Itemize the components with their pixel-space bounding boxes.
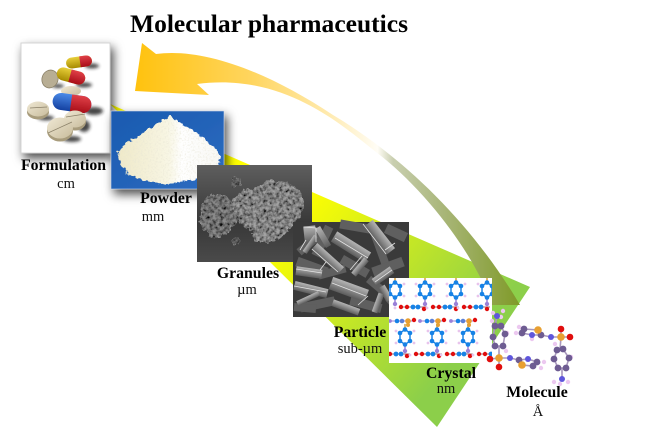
label: molecule angstrom: Molecule — [506, 384, 568, 401]
sulfur atoms — [495, 326, 565, 369]
label: granules micrometre: Granules — [217, 265, 279, 282]
round tablet upright — [39, 68, 61, 90]
label: molecule angstrom: Å — [533, 404, 544, 420]
curved arrow: molecule back to formulation — [135, 43, 520, 305]
label: formulation cm: Formulation — [21, 157, 106, 174]
pill shadows — [38, 64, 103, 142]
label: crystal nm — [426, 365, 477, 397]
capsule small yellow red — [65, 55, 93, 69]
panel: granules SEM photo — [197, 165, 312, 262]
label: powder mm: Powder — [140, 190, 192, 207]
panel: crystal packing diagram — [377, 277, 505, 363]
panel: powder photo — [111, 111, 224, 189]
gradient triangle: scale wedge — [110, 104, 530, 427]
label: powder mm: mm — [142, 209, 165, 225]
label: particle sub-micrometre: Particle — [334, 324, 386, 341]
capsule blue red — [52, 92, 92, 114]
carbon atoms — [490, 323, 572, 371]
label: granules micrometre: µm — [237, 282, 258, 298]
label: granules micrometre — [217, 265, 279, 298]
panel: formulation photo — [21, 43, 110, 153]
nitrogen atoms — [494, 313, 565, 382]
capsule medium yellow red — [55, 66, 87, 86]
label: formulation cm: cm — [57, 176, 76, 192]
title: Molecular pharmaceutics — [130, 11, 408, 38]
label: crystal nm: nm — [437, 381, 456, 397]
label: formulation cm — [21, 157, 106, 192]
oxygen atoms — [487, 326, 573, 370]
label: crystal nm: Crystal — [426, 365, 477, 382]
label: molecule angstrom — [506, 384, 568, 420]
flat tablet behind capsule — [61, 86, 81, 96]
ball-and-stick molecule — [487, 309, 573, 386]
label: powder mm — [140, 190, 192, 225]
hydrogen atoms — [490, 309, 573, 386]
label: particle sub-micrometre: sub-µm — [338, 341, 383, 357]
panel: particle SEM photo — [293, 219, 409, 317]
label: particle sub-micrometre — [334, 324, 386, 357]
tablets — [27, 102, 86, 142]
